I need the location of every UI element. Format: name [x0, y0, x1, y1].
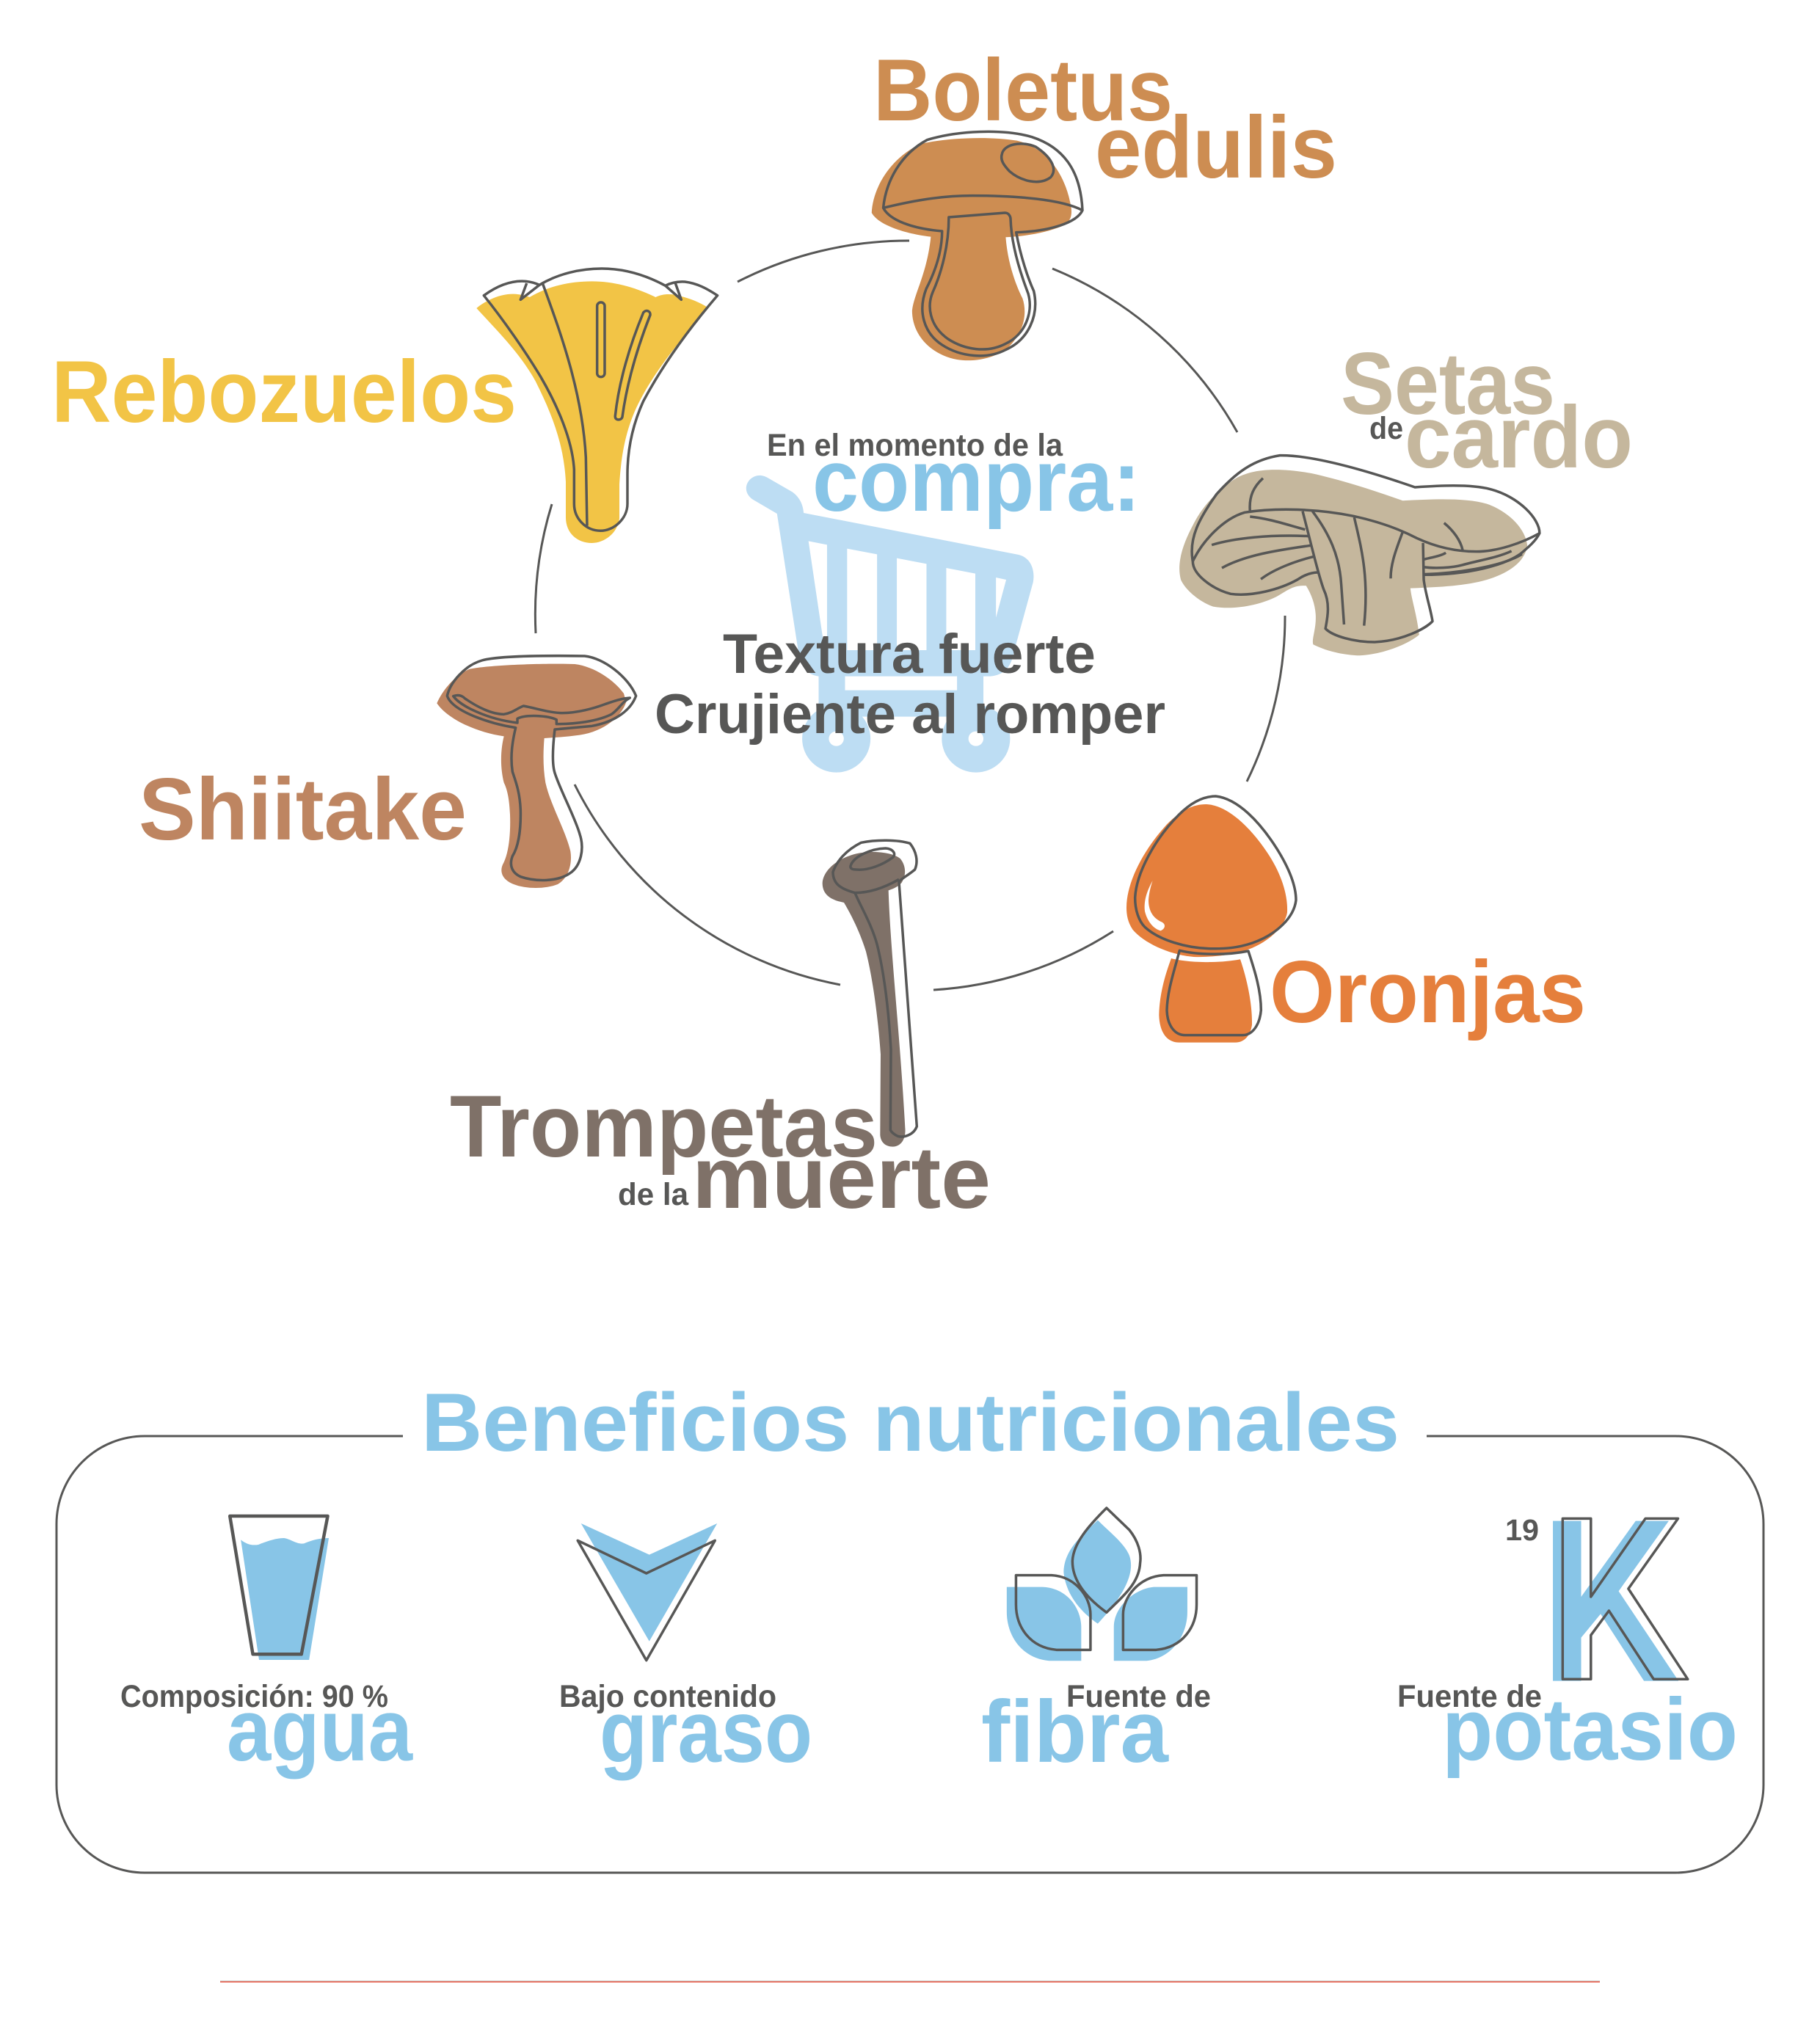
label: setas de cardo: de — [1369, 411, 1403, 446]
label: setas de cardo: cardo — [1405, 388, 1633, 487]
text: fuente de fibra: fibra — [981, 1683, 1169, 1781]
text: atomic number: 19 — [1505, 1513, 1539, 1547]
label: trompetas de la muerte — [450, 1077, 991, 1227]
heading: en el momento de la compra: compra: — [812, 431, 1140, 530]
cycle ring arcs — [535, 241, 1285, 990]
label: boletus edulis: edulis — [1095, 98, 1337, 197]
text: bajo contenido graso: Bajo contenido — [559, 1679, 776, 1714]
footer rule — [220, 1981, 1600, 1983]
icon: glass of water — [230, 1516, 329, 1660]
text: textura y crujiente — [655, 623, 1165, 746]
label: setas de cardo — [1341, 335, 1633, 487]
label: oronjas: Oronjas — [1270, 943, 1586, 1041]
text: textura y crujiente: Crujiente al romper — [655, 683, 1165, 746]
text: textura y crujiente: Textura fuerte — [723, 623, 1096, 685]
mushroom: setas de cardo — [1179, 456, 1540, 655]
icon: potassium symbol — [1553, 1518, 1688, 1681]
label: setas de cardo: Setas — [1341, 335, 1555, 433]
text: fuente de potasio: potasio — [1442, 1680, 1738, 1779]
text: composicion agua: agua — [227, 1681, 413, 1780]
label: trompetas de la muerte: de la — [618, 1177, 689, 1212]
label: trompetas de la muerte: Trompetas — [450, 1077, 878, 1176]
label: boletus edulis — [873, 41, 1337, 197]
mushroom: rebozuelos — [476, 269, 718, 543]
heading: en el momento de la compra: En el momento de la — [767, 428, 1063, 463]
heading: beneficios nutricionales: Beneficios nutricionales — [421, 1377, 1399, 1468]
mushroom: trompetas de la muerte — [823, 840, 917, 1147]
text: fuente de fibra: Fuente de — [1066, 1679, 1211, 1714]
mushroom: shiitake — [437, 656, 636, 888]
panel: beneficios nutricionales — [57, 1377, 1763, 1873]
text: composicion agua: Composición: 90 % — [120, 1679, 388, 1714]
panel frame — [57, 1436, 1763, 1873]
mushroom: oronjas — [1126, 796, 1296, 1043]
text: composicion agua — [120, 1679, 413, 1780]
label: trompetas de la muerte: muerte — [692, 1129, 991, 1227]
label: shiitake: Shiitake — [139, 760, 467, 859]
icon: fibre leaves — [1007, 1508, 1197, 1661]
mushroom: boletus edulis — [872, 131, 1082, 360]
text: fuente de potasio: Fuente de — [1397, 1679, 1542, 1714]
label: rebozuelos: Rebozuelos — [51, 343, 517, 441]
text: bajo contenido graso: graso — [600, 1683, 812, 1781]
icon: low fat chevron — [578, 1523, 717, 1661]
icon: shopping cart — [746, 476, 1033, 773]
label: boletus edulis: Boletus — [873, 41, 1173, 139]
